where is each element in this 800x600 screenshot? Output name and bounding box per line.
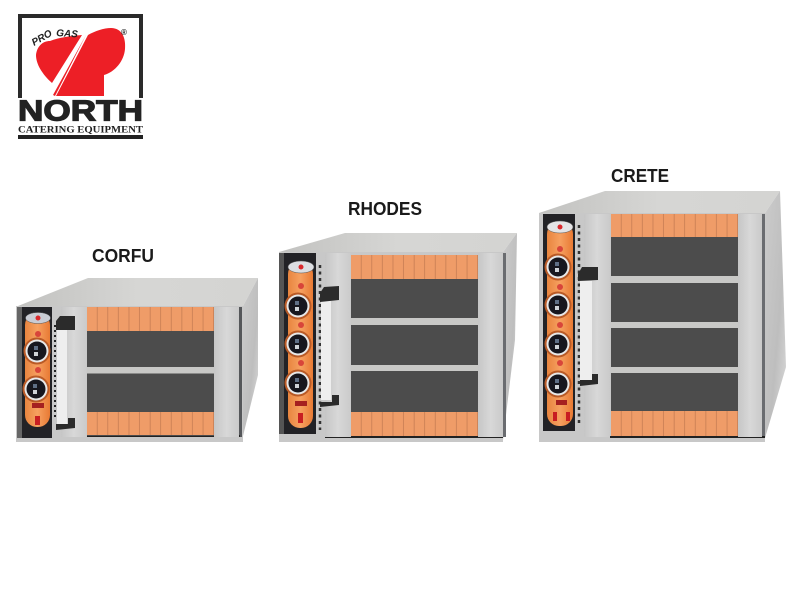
right jamb (214, 307, 239, 437)
logo frame (18, 14, 143, 98)
hinge strip (316, 253, 325, 438)
switches (32, 403, 44, 408)
orange fascia (547, 222, 573, 426)
top heating tiles (351, 255, 478, 279)
cabinet side (503, 233, 517, 440)
bottom heating tiles (611, 411, 738, 436)
door stile (325, 253, 351, 437)
knobs (544, 254, 572, 280)
knobs (284, 292, 312, 320)
indicator lights (557, 246, 563, 252)
cabinet side (243, 278, 258, 436)
front frame (279, 252, 503, 442)
front frame (539, 213, 765, 442)
orange fascia (25, 313, 50, 427)
cabinet top (279, 233, 517, 252)
panel badge (26, 312, 50, 324)
bottom heating tiles (351, 412, 478, 436)
right jamb (478, 253, 503, 437)
door handle (578, 267, 598, 386)
shelf (87, 367, 214, 374)
door stile (584, 214, 610, 437)
oven interior (611, 214, 738, 436)
hinge strip (575, 214, 584, 438)
cabinet side (765, 191, 786, 438)
door handle (56, 316, 75, 430)
cabinet top (539, 191, 780, 213)
panel badge (288, 261, 314, 273)
oven interior (351, 255, 478, 436)
switches (295, 401, 307, 406)
switches (556, 400, 567, 405)
front frame (16, 306, 243, 442)
registered mark: ® (121, 28, 127, 37)
oven interior (87, 307, 214, 436)
bottom heating tiles (87, 412, 214, 435)
panel badge (547, 221, 573, 233)
shelves (611, 276, 738, 373)
control panel (543, 214, 575, 431)
hinge strip (52, 307, 61, 438)
brand text: PRO GAS: PRO (30, 28, 54, 49)
knobs (24, 338, 50, 364)
top heating tiles (87, 307, 214, 331)
control panel (17, 307, 52, 438)
brand text: NORTH: NORTH (18, 96, 143, 128)
oven: RHODES (279, 233, 517, 442)
icon: red chef hat (36, 28, 125, 96)
logo: North Catering Equipment: GAS (56, 28, 79, 41)
heading: RHODES: RHODES (348, 199, 422, 219)
logo: North Catering Equipment (18, 14, 144, 139)
indicator lights (35, 331, 41, 337)
top heating tiles (611, 214, 738, 237)
logo bottom bar (18, 135, 143, 139)
oven: CORFU (16, 278, 258, 442)
shelves (351, 318, 478, 371)
door stile (61, 307, 87, 437)
tagline: CATERING EQUIPMENT (18, 126, 144, 136)
heading: CRETE: CRETE (611, 166, 669, 186)
oven: CRETE (539, 191, 786, 442)
indicator lights (298, 283, 304, 289)
door handle (320, 286, 339, 407)
right jamb (738, 214, 762, 437)
heading: CORFU: CORFU (92, 246, 154, 266)
orange fascia (288, 262, 313, 428)
control panel (279, 253, 316, 434)
cabinet top (18, 278, 258, 306)
